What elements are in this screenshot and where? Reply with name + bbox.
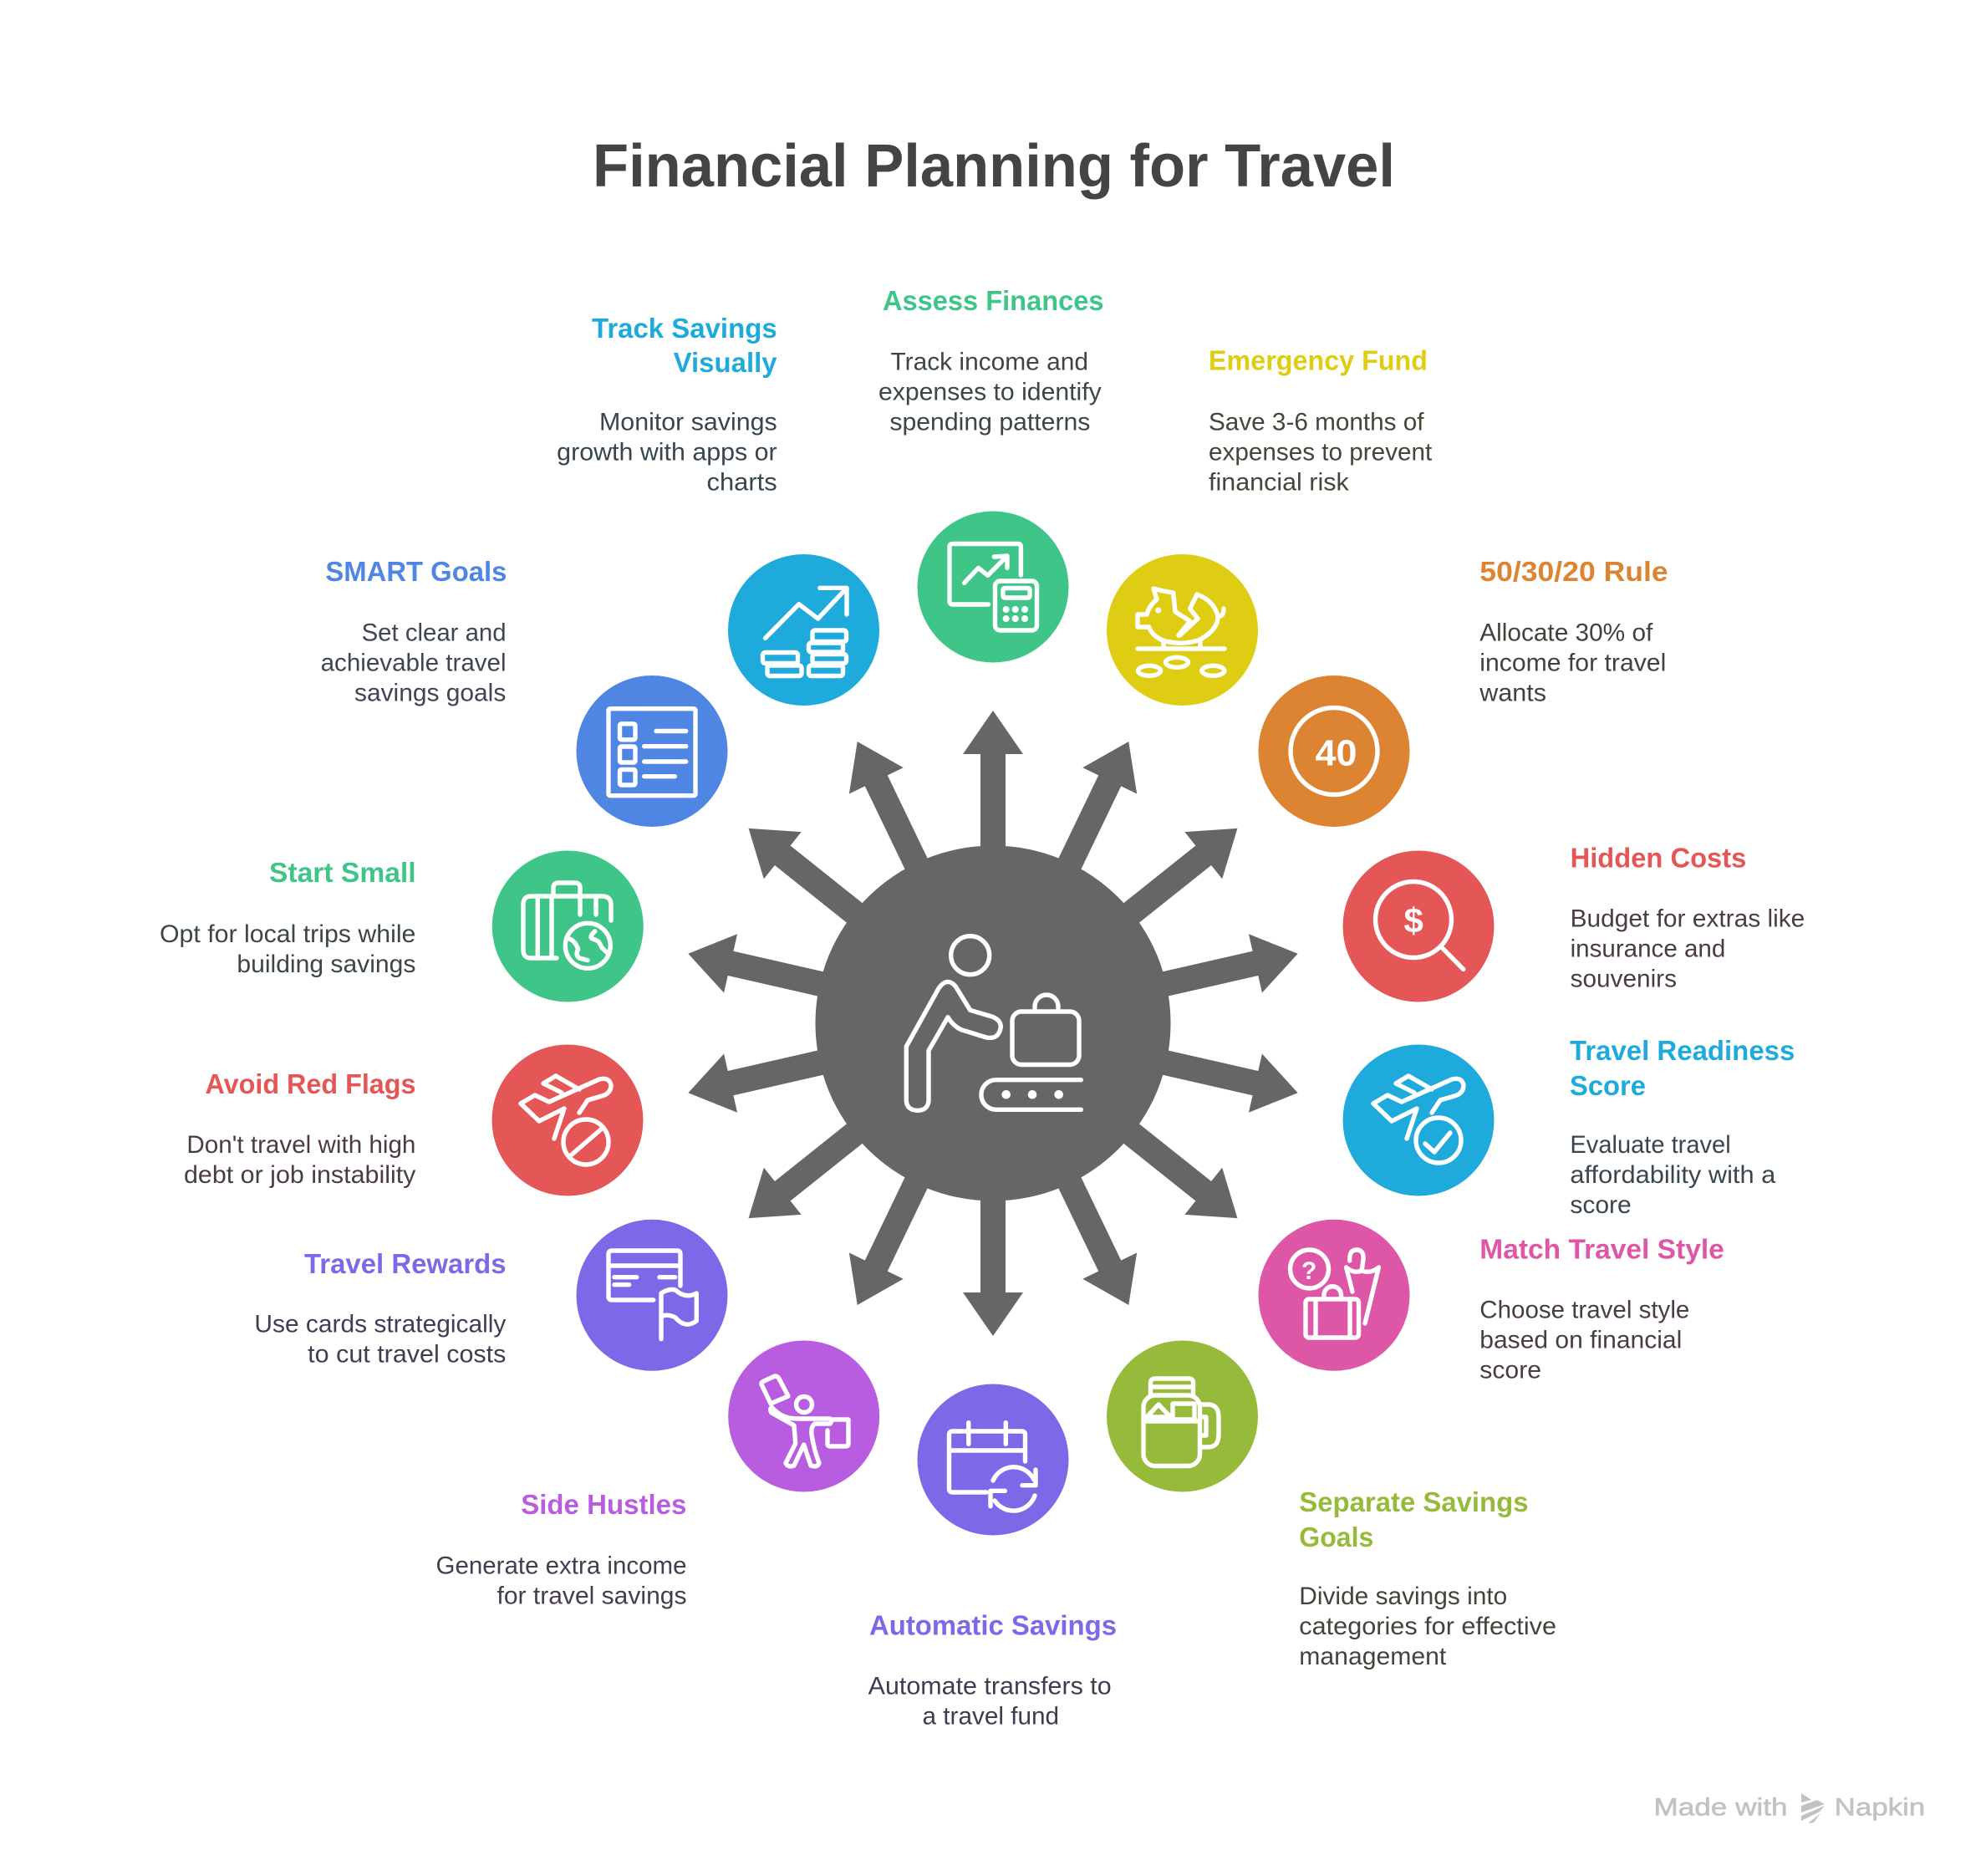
icon: traveller at baggage carousel (906, 936, 1081, 1110)
description (321, 619, 507, 707)
arrow 1 (963, 711, 1023, 856)
description: management (1299, 1643, 1446, 1670)
heading: Travel Readiness (1570, 1035, 1795, 1066)
description: spending patterns (889, 408, 1090, 436)
heading: Start Small (269, 857, 416, 888)
description: Allocate 30% of (1479, 619, 1653, 647)
item: Side Hustles (436, 1341, 879, 1610)
heading: Match Travel Style (1479, 1233, 1724, 1264)
description: Monitor savings (599, 408, 777, 436)
description: score (1479, 1357, 1541, 1384)
description: Set clear and (362, 619, 507, 647)
watermark brand: Napkin (1835, 1794, 1925, 1822)
description: Use cards strategically (254, 1311, 507, 1338)
description: to cut travel costs (308, 1341, 506, 1368)
description (1479, 1297, 1689, 1384)
description: financial risk (1209, 468, 1349, 496)
item: 50/30/20 Rule (1259, 556, 1668, 827)
heading: Automatic Savings (869, 1609, 1117, 1640)
heading: Goals (1299, 1522, 1373, 1552)
item: Hidden Costs (1342, 842, 1805, 1002)
description: building savings (237, 951, 415, 978)
item: Match Travel Style (1259, 1220, 1724, 1384)
description (1479, 619, 1666, 707)
description: debt or job instability (184, 1161, 416, 1189)
heading: Track Savings (592, 313, 777, 344)
heading (1570, 1035, 1795, 1101)
item: Separate Savings Goals (1107, 1341, 1556, 1670)
heading: Travel Rewards (304, 1248, 507, 1279)
heading: Side Hustles (521, 1489, 686, 1520)
heading: SMART Goals (325, 556, 507, 587)
item: Start Small (160, 851, 644, 1002)
icon: calendar with refresh arrows (918, 1384, 1068, 1535)
description: savings goals (354, 679, 506, 707)
description: for travel savings (496, 1583, 687, 1610)
arrow 6 (1105, 1104, 1256, 1241)
description: categories for effective (1299, 1613, 1556, 1640)
icon: savings jar (1107, 1341, 1258, 1491)
description (436, 1552, 687, 1610)
description: Choose travel style (1479, 1297, 1689, 1324)
item: Travel Rewards (254, 1220, 727, 1371)
description: Don't travel with high (186, 1131, 415, 1159)
description: based on financial (1479, 1327, 1682, 1354)
icon: magnifier with dollar: $ (1404, 901, 1423, 940)
item: Travel Readiness Score (1342, 1035, 1795, 1219)
icon: checklist (577, 675, 727, 827)
watermark: Made with Napkin (1653, 1793, 1925, 1823)
icon: rising chart over coins (728, 554, 879, 706)
heading (592, 313, 777, 378)
description: expenses to prevent (1209, 438, 1432, 466)
arrow 5 (1149, 1031, 1305, 1122)
arrow 3 (1105, 805, 1256, 942)
icon: question mark, suitcase, umbrella (1259, 1220, 1409, 1371)
description: income for travel (1479, 649, 1666, 677)
description (184, 1131, 416, 1189)
arrow 7 (1038, 1161, 1156, 1318)
icon: dial with 40: 40 (1316, 732, 1357, 774)
title: Financial Planning for Travel (593, 133, 1395, 200)
heading: Avoid Red Flags (206, 1068, 416, 1099)
heading: Hidden Costs (1571, 842, 1746, 873)
icon: person carrying boxes (728, 1341, 879, 1491)
heading: Assess Finances (883, 285, 1103, 316)
description: charts (707, 468, 777, 496)
description: Save 3-6 months of (1209, 408, 1424, 436)
arrow 8 (963, 1190, 1023, 1336)
description: a travel fund (923, 1702, 1059, 1731)
arrow 13 (730, 805, 881, 942)
icon: question mark, suitcase, umbrella: ? (1301, 1257, 1316, 1285)
icon: card with flag (577, 1220, 727, 1371)
arrow 4 (1149, 925, 1305, 1016)
description: Opt for local trips while (160, 920, 415, 948)
heading: 50/30/20 Rule (1479, 556, 1668, 587)
item: Assess Finances (878, 285, 1103, 662)
description: affordability with a (1570, 1161, 1776, 1189)
heading (1299, 1486, 1528, 1552)
heading: Separate Savings (1299, 1486, 1528, 1517)
heading: Score (1570, 1070, 1646, 1101)
description: Budget for extras like (1571, 905, 1805, 933)
arrow 2 (1038, 728, 1156, 885)
description: Divide savings into (1299, 1583, 1507, 1610)
description (254, 1311, 507, 1368)
description: Track income and (891, 348, 1088, 375)
arrow 12 (681, 925, 837, 1016)
hub circle (816, 846, 1170, 1201)
arrow 10 (730, 1104, 881, 1241)
arrow 14 (830, 728, 948, 885)
heading: Emergency Fund (1209, 344, 1428, 376)
description: wants (1479, 679, 1546, 707)
icon: plane with check (1342, 1045, 1495, 1195)
description: souvenirs (1571, 966, 1677, 993)
description (1571, 905, 1805, 993)
item: SMART Goals (321, 556, 727, 827)
description: Automate transfers to (868, 1672, 1112, 1700)
icon: magnifier with dollar (1342, 851, 1495, 1002)
description (1570, 1131, 1776, 1219)
description: achievable travel (321, 649, 507, 677)
description: growth with apps or (557, 438, 777, 466)
description (1209, 408, 1432, 496)
description: score (1570, 1191, 1632, 1219)
watermark text: Made with (1653, 1794, 1787, 1822)
item: Avoid Red Flags (184, 1045, 644, 1195)
icon: broken piggy bank (1107, 554, 1258, 706)
item: Automatic Savings (868, 1384, 1117, 1731)
icon: suitcase with globe (492, 851, 644, 1002)
icon: plane with prohibition sign (491, 1045, 644, 1195)
heading: Visually (674, 347, 777, 378)
description: Generate extra income (436, 1552, 687, 1580)
description (878, 348, 1102, 436)
description: Evaluate travel (1570, 1131, 1731, 1159)
description (557, 408, 777, 496)
description (868, 1672, 1112, 1731)
central hub with radiating arrows (681, 711, 1305, 1336)
arrow 11 (681, 1031, 837, 1122)
item: Emergency Fund (1107, 344, 1432, 706)
icon: dial with 40 (1259, 675, 1409, 827)
arrow 9 (830, 1161, 948, 1318)
icon: Napkin logo (1801, 1793, 1825, 1823)
description (160, 920, 415, 978)
description: expenses to identify (878, 378, 1102, 405)
icon: chart and calculator (918, 512, 1068, 662)
item: Track Savings Visually (557, 313, 879, 706)
description: insurance and (1571, 935, 1725, 963)
description (1299, 1583, 1556, 1670)
